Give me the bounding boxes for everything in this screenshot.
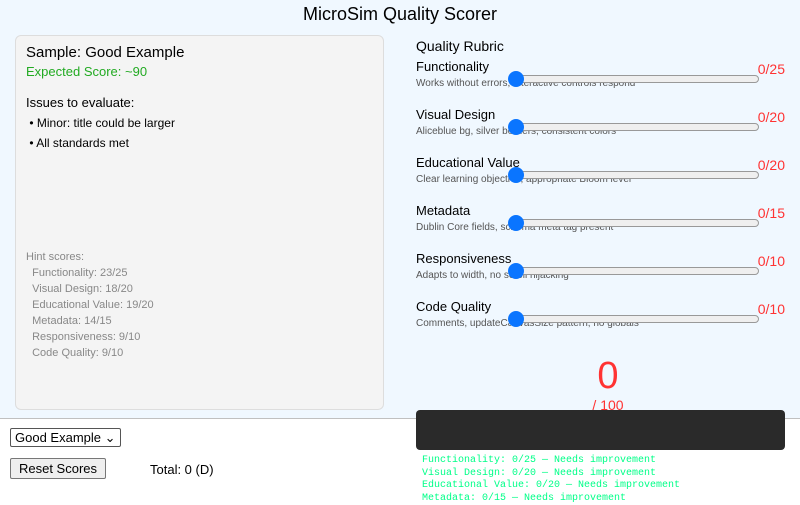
row: functionality: 0/25 (758, 61, 785, 77)
rubric rows (416, 59, 785, 329)
row: code quality (416, 299, 785, 329)
feedback text (422, 454, 680, 504)
hint scores: Responsiveness: 9/10 (32, 331, 140, 343)
total score: / 100 (592, 397, 624, 413)
row: code quality: 0/10 (758, 301, 785, 317)
feedback text: Educational Value: 0/20 — Needs improvement (422, 480, 680, 491)
sample heading: Sample: Good Example (26, 44, 184, 61)
expected score: Expected Score: ~90 (26, 64, 147, 79)
hint scores: Metadata: 14/15 (32, 315, 112, 327)
row: responsiveness: 0/10 (758, 253, 785, 269)
row: educational value: Clear learning objective, appropriate Bloom level (416, 174, 631, 185)
title: MicroSim Quality Scorer (303, 4, 497, 24)
dark feedback box (416, 410, 785, 450)
issues list: Issues to evaluate: (26, 95, 134, 110)
hint scores: Educational Value: 19/20 (32, 299, 154, 311)
row: educational value (416, 155, 785, 185)
hint scores: Code Quality: 9/10 (32, 347, 123, 359)
row: code quality: Comments, updateCanvasSize pattern, no globals (416, 318, 639, 329)
sample select: Good Example ⌄ (15, 430, 116, 445)
panel: sample (15, 35, 384, 410)
row: visual design (416, 107, 785, 137)
hint scores: Hint scores: (26, 251, 84, 263)
hint scores: Visual Design: 18/20 (32, 283, 133, 295)
rubric heading: Quality Rubric (416, 38, 504, 54)
row: metadata: Dublin Core fields, schema meta tag present (416, 222, 613, 233)
row: functionality: Functionality (416, 59, 489, 74)
issues list: • Minor: title could be larger (29, 116, 175, 130)
row: responsiveness (416, 251, 785, 281)
total text: Total: 0 (D) (150, 462, 214, 477)
row: functionality (416, 59, 785, 89)
total score: 0 (597, 355, 619, 397)
hint scores: Functionality: 23/25 (32, 267, 128, 279)
row: visual design: Visual Design (416, 107, 495, 122)
feedback text: Metadata: 0/15 — Needs improvement (422, 492, 626, 504)
total score (592, 355, 624, 413)
row: responsiveness: Adapts to width, no scroll hijacking (416, 270, 569, 281)
row: functionality: Works without errors, interactive controls respond (416, 78, 635, 89)
row: responsiveness: Responsiveness (416, 251, 511, 266)
reset button (10, 458, 106, 479)
row: visual design: Aliceblue bg, silver borders, consistent colors (416, 126, 616, 137)
row: metadata (416, 203, 785, 233)
issues list: • All standards met (29, 136, 129, 150)
hint scores (26, 251, 154, 359)
row: educational value: 0/20 (758, 157, 785, 173)
row: visual design: 0/20 (758, 109, 785, 125)
issues list (26, 95, 175, 150)
row: metadata: 0/15 (758, 205, 785, 221)
row: educational value: Educational Value (416, 155, 520, 170)
feedback text: Functionality: 0/25 — Needs improvement (422, 455, 656, 466)
row: metadata: Metadata (416, 203, 470, 218)
row: code quality: Code Quality (416, 299, 491, 314)
reset button: Reset Scores (19, 461, 97, 476)
feedback text: Visual Design: 0/20 — Needs improvement (422, 468, 656, 478)
